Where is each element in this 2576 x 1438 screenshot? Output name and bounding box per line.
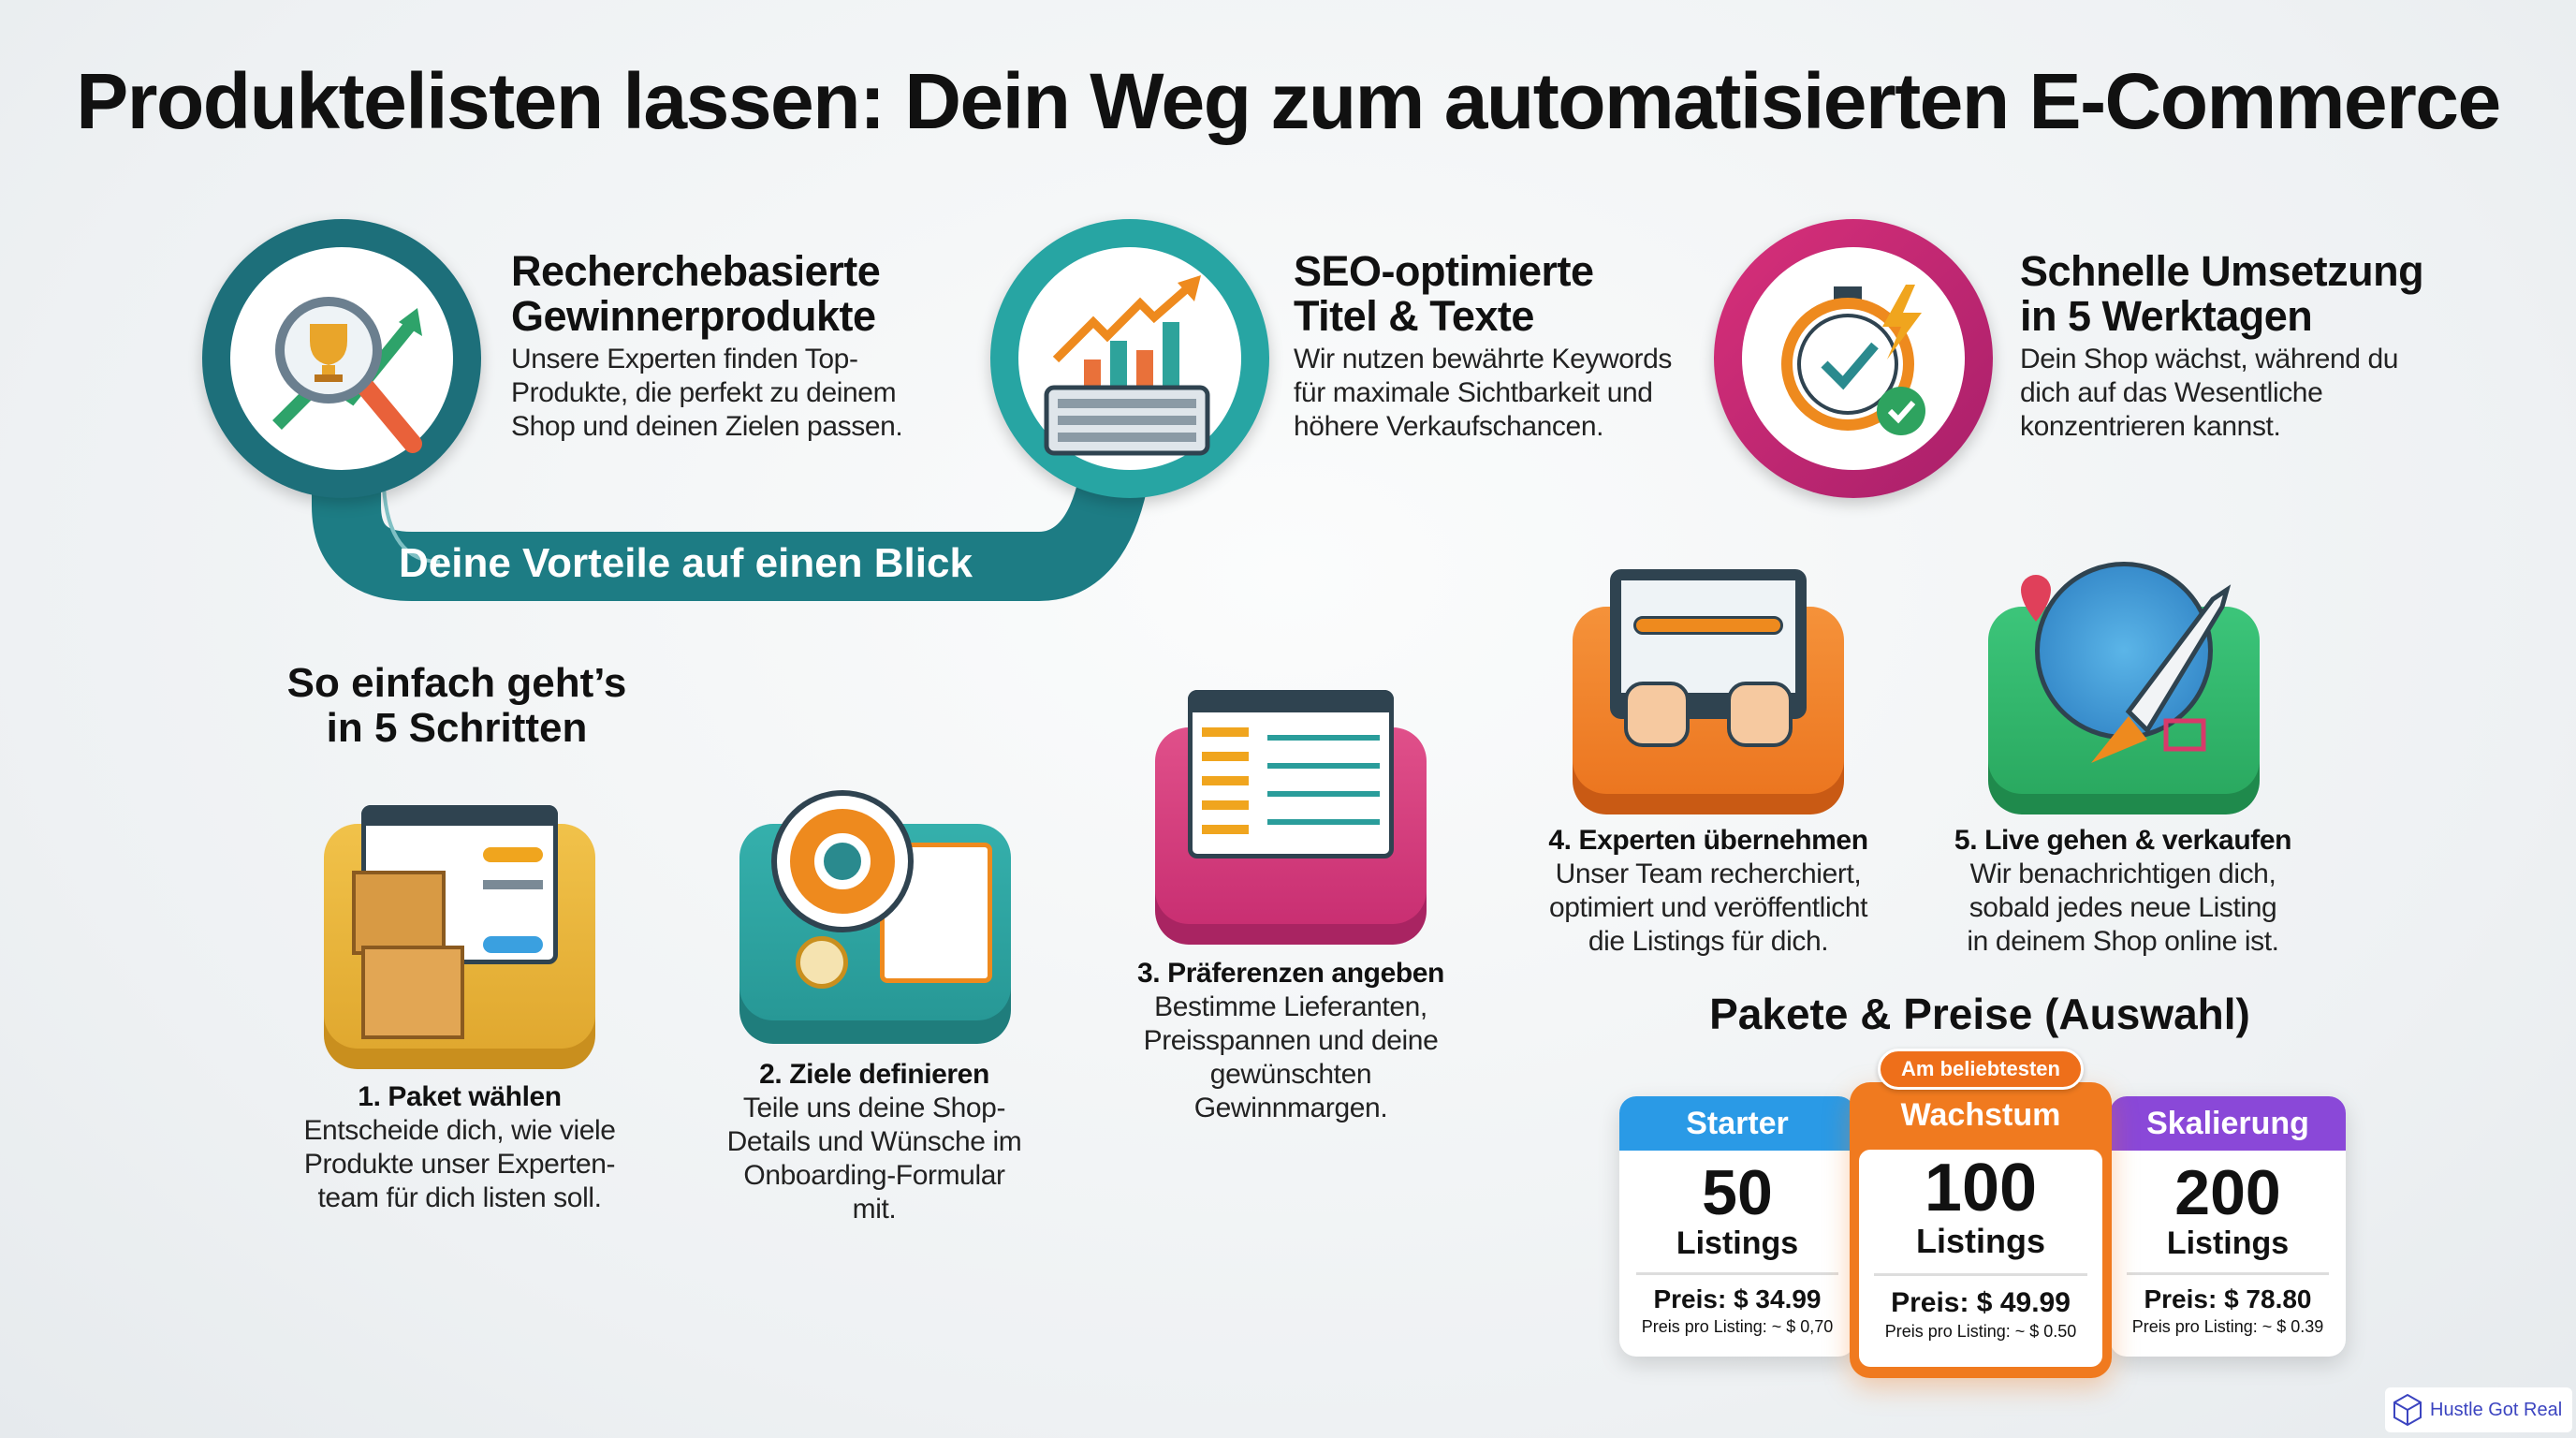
step 5 icon: globe rocket tile — [1988, 562, 2260, 814]
step 1 text: team für dich listen soll. — [317, 1182, 602, 1213]
text: Recherchebasierte Gewinnerprodukte: Gewinnerprodukte — [511, 292, 876, 340]
pricing card: Wachstum (featured): 100 — [1925, 1151, 2037, 1225]
pricing card: Wachstum (featured) — [1834, 1049, 2128, 1403]
text: Schnelle Umsetzung: in 5 Werktagen — [2020, 292, 2312, 340]
pricing card: Starter: Preis: $ 34.99 — [1653, 1284, 1822, 1313]
badge: Am beliebtesten — [1878, 1049, 2084, 1090]
step 4 icon: laptop hands tile — [1573, 569, 1844, 814]
step 4 text: Unser Team recherchiert, — [1556, 858, 1861, 889]
text: Recherchebasierte Gewinnerprodukte: Unsere Experten finden Top- — [511, 344, 858, 374]
step 2 text: mit. — [853, 1194, 896, 1225]
heading: So einfach geht's — [287, 660, 626, 751]
connector band: Deine Vorteile: Deine Vorteile auf einen Blick — [399, 540, 973, 586]
step 1 icon: boxes tile — [324, 805, 595, 1069]
step 2 text: Onboarding-Formular — [743, 1160, 1005, 1191]
text: Schnelle Umsetzung: Dein Shop wächst, während du — [2020, 344, 2398, 374]
text: Schnelle Umsetzung: Schnelle Umsetzung — [2020, 247, 2423, 295]
pricing card: Skalierung: 200 — [2174, 1157, 2281, 1228]
pricing card: Starter: 50 — [1702, 1157, 1773, 1228]
step 3 text: gewünschten — [1210, 1059, 1371, 1090]
pricing card: Wachstum (featured): Preis pro Listing: ~ $ 0.50 — [1885, 1322, 2076, 1341]
step 2 text — [727, 1059, 1021, 1225]
step 2 text: 2. Ziele definieren — [759, 1059, 989, 1090]
step 4 text: 4. Experten übernehmen — [1548, 825, 1868, 856]
pricing card: Wachstum (featured): Listings — [1916, 1222, 2045, 1260]
step 3 text: Preisspannen und deine — [1144, 1025, 1438, 1056]
text: SEO-optimierte Titel & Texte: für maximale Sichtbarkeit und — [1294, 377, 1653, 408]
text: Schnelle Umsetzung — [2020, 247, 2423, 442]
icon circle 1: trophy magnifier — [202, 219, 481, 498]
text: Recherchebasierte Gewinnerprodukte — [511, 247, 902, 442]
pricing card: Skalierung: Skalierung — [2146, 1105, 2309, 1140]
step 3 text: Bestimme Lieferanten, — [1154, 991, 1427, 1022]
text: SEO-optimierte Titel & Texte: höhere Verkaufschancen. — [1294, 411, 1603, 442]
step 5 text — [1954, 825, 2291, 957]
step 1 text — [303, 1081, 616, 1213]
step 2 text: Teile uns deine Shop- — [743, 1093, 1005, 1123]
text: Recherchebasierte Gewinnerprodukte: Recherchebasierte — [511, 247, 880, 295]
step 5 text: sobald jedes neue Listing — [1969, 892, 2276, 923]
step 2 icon: target tile — [739, 790, 1011, 1044]
watermark — [2385, 1387, 2572, 1432]
text: Recherchebasierte Gewinnerprodukte: Shop und deinen Zielen passen. — [511, 411, 902, 442]
pricing card: Skalierung: Listings — [2167, 1225, 2289, 1261]
pricing card: Starter: Listings — [1676, 1225, 1798, 1261]
pricing card: Wachstum (featured): Preis: $ 49.99 — [1891, 1287, 2071, 1318]
pricing card: Skalierung: Preis pro Listing: ~ $ 0.39 — [2132, 1317, 2323, 1336]
watermark: Hustle Got Real — [2430, 1399, 2562, 1419]
step 3 text: Gewinnmargen. — [1194, 1093, 1387, 1123]
step 5 text: Wir benachrichtigen dich, — [1970, 858, 2276, 889]
pricing card: Skalierung — [2110, 1096, 2346, 1357]
step 4 text — [1548, 825, 1868, 957]
text: Recherchebasierte Gewinnerprodukte: Produkte, die perfekt zu deinem — [511, 377, 896, 408]
step 3 text — [1137, 958, 1444, 1123]
step 5 text: 5. Live gehen & verkaufen — [1954, 825, 2291, 856]
pricing card: Starter — [1619, 1096, 1855, 1357]
pricing card: Skalierung: Preis: $ 78.80 — [2144, 1284, 2312, 1313]
step 1 text: Produkte unser Experten- — [304, 1149, 615, 1180]
text: Schnelle Umsetzung: konzentrieren kannst. — [2020, 411, 2280, 442]
step 4 text: die Listings für dich. — [1588, 926, 1828, 957]
icon circle 2: chart keyboard — [990, 219, 1269, 498]
step 1 text: Entscheide dich, wie viele — [303, 1115, 616, 1146]
text: SEO-optimierte Titel & Texte — [1294, 247, 1672, 442]
pricing card: Wachstum (featured): Wachstum — [1901, 1097, 2060, 1133]
text: SEO-optimierte Titel & Texte: SEO-optimierte — [1294, 247, 1594, 295]
step 3 icon: sliders tile — [1155, 690, 1427, 945]
icon circle 3: stopwatch — [1714, 219, 1993, 498]
step 2 text: Details und Wünsche im — [727, 1126, 1021, 1157]
step 5 text: in deinem Shop online ist. — [1967, 926, 2279, 957]
pricing heading: Pakete & Preise (Auswahl) — [1709, 990, 2250, 1038]
connector band: Deine Vorteile — [312, 487, 1146, 601]
badge: Am beliebtesten: Am beliebtesten — [1901, 1057, 2060, 1080]
text: SEO-optimierte Titel & Texte: Wir nutzen bewährte Keywords — [1294, 344, 1672, 374]
pricing card: Starter: Preis pro Listing: ~ $ 0,70 — [1642, 1317, 1833, 1336]
heading: So einfach geht's: So einfach geht’s — [287, 660, 626, 706]
heading: So einfach geht's: in 5 Schritten — [327, 705, 587, 751]
step 4 text: optimiert und veröffentlicht — [1549, 892, 1867, 923]
text: Schnelle Umsetzung: dich auf das Wesentliche — [2020, 377, 2322, 408]
step 3 text: 3. Präferenzen angeben — [1137, 958, 1444, 989]
text: SEO-optimierte Titel & Texte: Titel & Texte — [1294, 292, 1534, 340]
pricing card: Starter: Starter — [1686, 1105, 1789, 1140]
title: Produktelisten lassen: Dein Weg zum automatisierten E-Commerce — [76, 57, 2500, 145]
step 1 text: 1. Paket wählen — [358, 1081, 562, 1112]
